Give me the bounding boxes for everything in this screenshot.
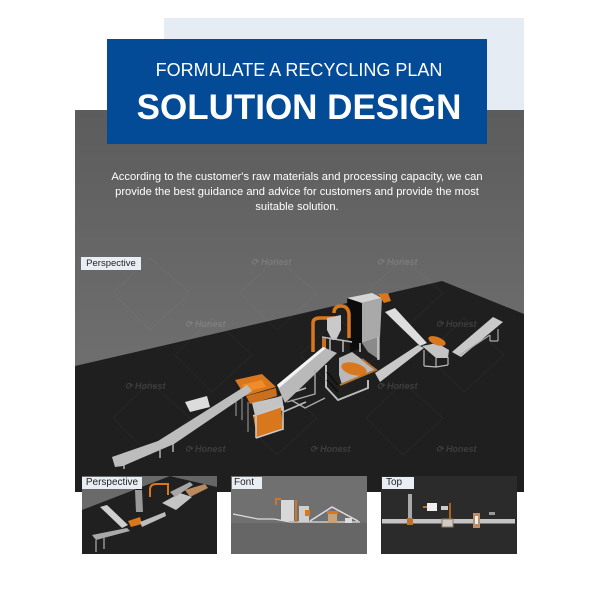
panel: 3D layout render: ⟳ Honest (436, 444, 478, 454)
panel: 3D layout render: ⟳ Honest (251, 257, 293, 267)
panel: 3D layout render: ⟳ Honest (377, 381, 419, 391)
banner title: SOLUTION DESIGN (137, 88, 461, 126)
panel: 3D layout render: ⟳ Honest (185, 319, 227, 329)
panel: 3D layout render: ⟳ Honest (436, 319, 478, 329)
panel: light blue backdrop (164, 18, 524, 110)
lower shredder with orange hopper (235, 374, 306, 438)
main view label: Perspective (86, 258, 136, 269)
shredder table (326, 352, 376, 400)
header banner (107, 39, 487, 144)
top right conveyor (378, 293, 427, 346)
panel: 3D layout render (75, 110, 524, 492)
dust collector (347, 293, 382, 360)
panel: 3D layout render: ⟳ Honest (185, 444, 227, 454)
magnet unit (422, 334, 449, 367)
banner subtitle: FORMULATE A RECYCLING PLAN (156, 60, 442, 80)
long middle conveyor (375, 345, 424, 382)
thumbnail: front (231, 476, 367, 554)
dark floor (75, 281, 524, 492)
label (382, 477, 414, 489)
intro text: suitable solution. (255, 201, 339, 213)
cyclone and orange pipes (313, 306, 352, 352)
label (232, 477, 262, 489)
panel: 3D layout render: ⟳ Honest (377, 257, 419, 267)
thumbnail: perspective (82, 476, 217, 554)
intro text: According to the customer's raw materials and processing capacity, we can (111, 170, 483, 182)
thumbnail: top (381, 476, 517, 554)
intro text: provide the best guidance and advice for customers and provide the most (115, 186, 479, 198)
inclined conveyor (277, 347, 337, 408)
label: Top (386, 477, 402, 488)
panel: 3D layout render: ⟳ Honest (310, 444, 352, 454)
label: Font (234, 477, 254, 488)
intro text (111, 170, 483, 213)
label: Perspective (86, 477, 138, 488)
right conveyor (452, 317, 503, 357)
panel: 3D layout render: ⟳ Honest (125, 381, 167, 391)
feed conveyor (112, 385, 252, 469)
